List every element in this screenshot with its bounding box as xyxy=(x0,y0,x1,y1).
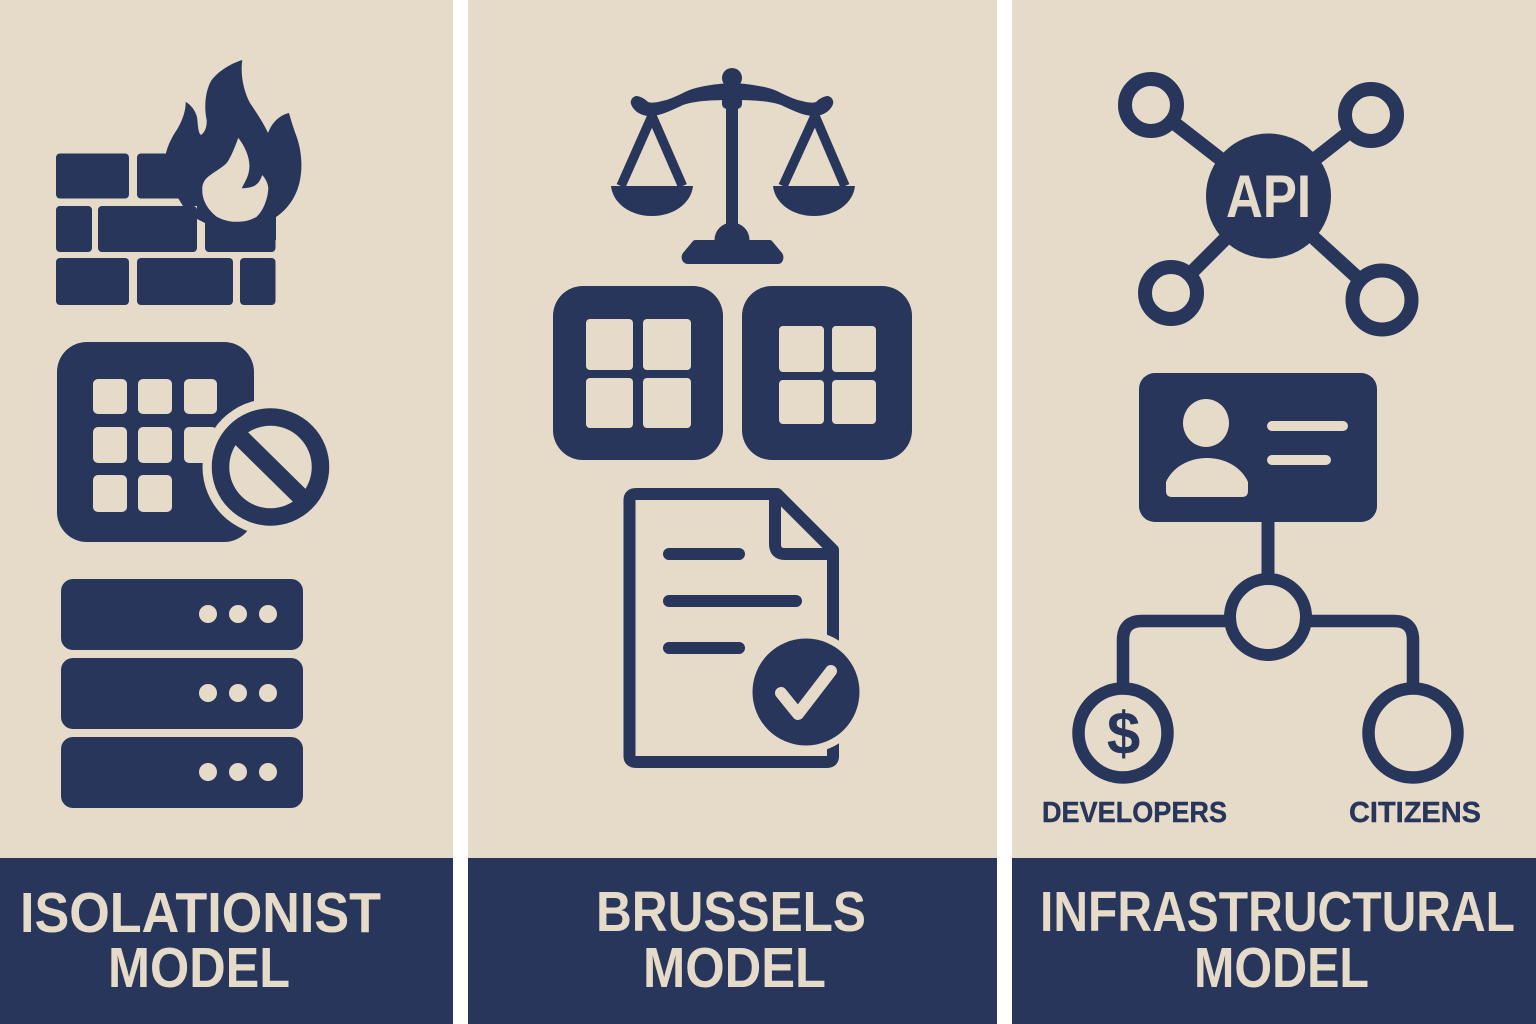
icon: server stack xyxy=(61,579,303,808)
node: citizens xyxy=(1349,688,1481,829)
footer band: infrastructural: MODEL xyxy=(1194,936,1369,1000)
icon: API hub network xyxy=(1125,79,1412,330)
node: developers: DEVELOPERS xyxy=(1042,797,1227,829)
footer band: isolationist: ISOLATIONIST xyxy=(20,881,381,945)
footer band: isolationist: MODEL xyxy=(108,936,290,1000)
icon: compliance document with checkmark xyxy=(630,494,867,762)
icon: API hub network: API xyxy=(1226,163,1311,230)
icon: left app grid xyxy=(553,286,723,460)
footer band: brussels xyxy=(468,858,997,1024)
node: developers xyxy=(1042,688,1227,829)
icon: right app grid xyxy=(742,286,912,460)
footer band: brussels: BRUSSELS xyxy=(596,880,866,944)
footer band: infrastructural xyxy=(1012,858,1536,1024)
diagram: hub routing to developers and citizens xyxy=(1042,522,1481,829)
panel: infrastructural model xyxy=(1012,0,1536,1024)
icon: firewall with flame xyxy=(56,60,301,305)
panel: brussels model xyxy=(468,0,997,1024)
icon: scales of justice xyxy=(611,68,855,264)
node: developers: $ xyxy=(1107,700,1140,767)
footer band: isolationist xyxy=(0,858,453,1024)
icon: identity card xyxy=(1139,373,1377,522)
node: citizens: CITIZENS xyxy=(1349,797,1481,829)
panel: isolationist model xyxy=(0,0,453,1024)
footer band: brussels: MODEL xyxy=(643,936,826,1000)
icon: blocked app grid xyxy=(57,342,338,542)
